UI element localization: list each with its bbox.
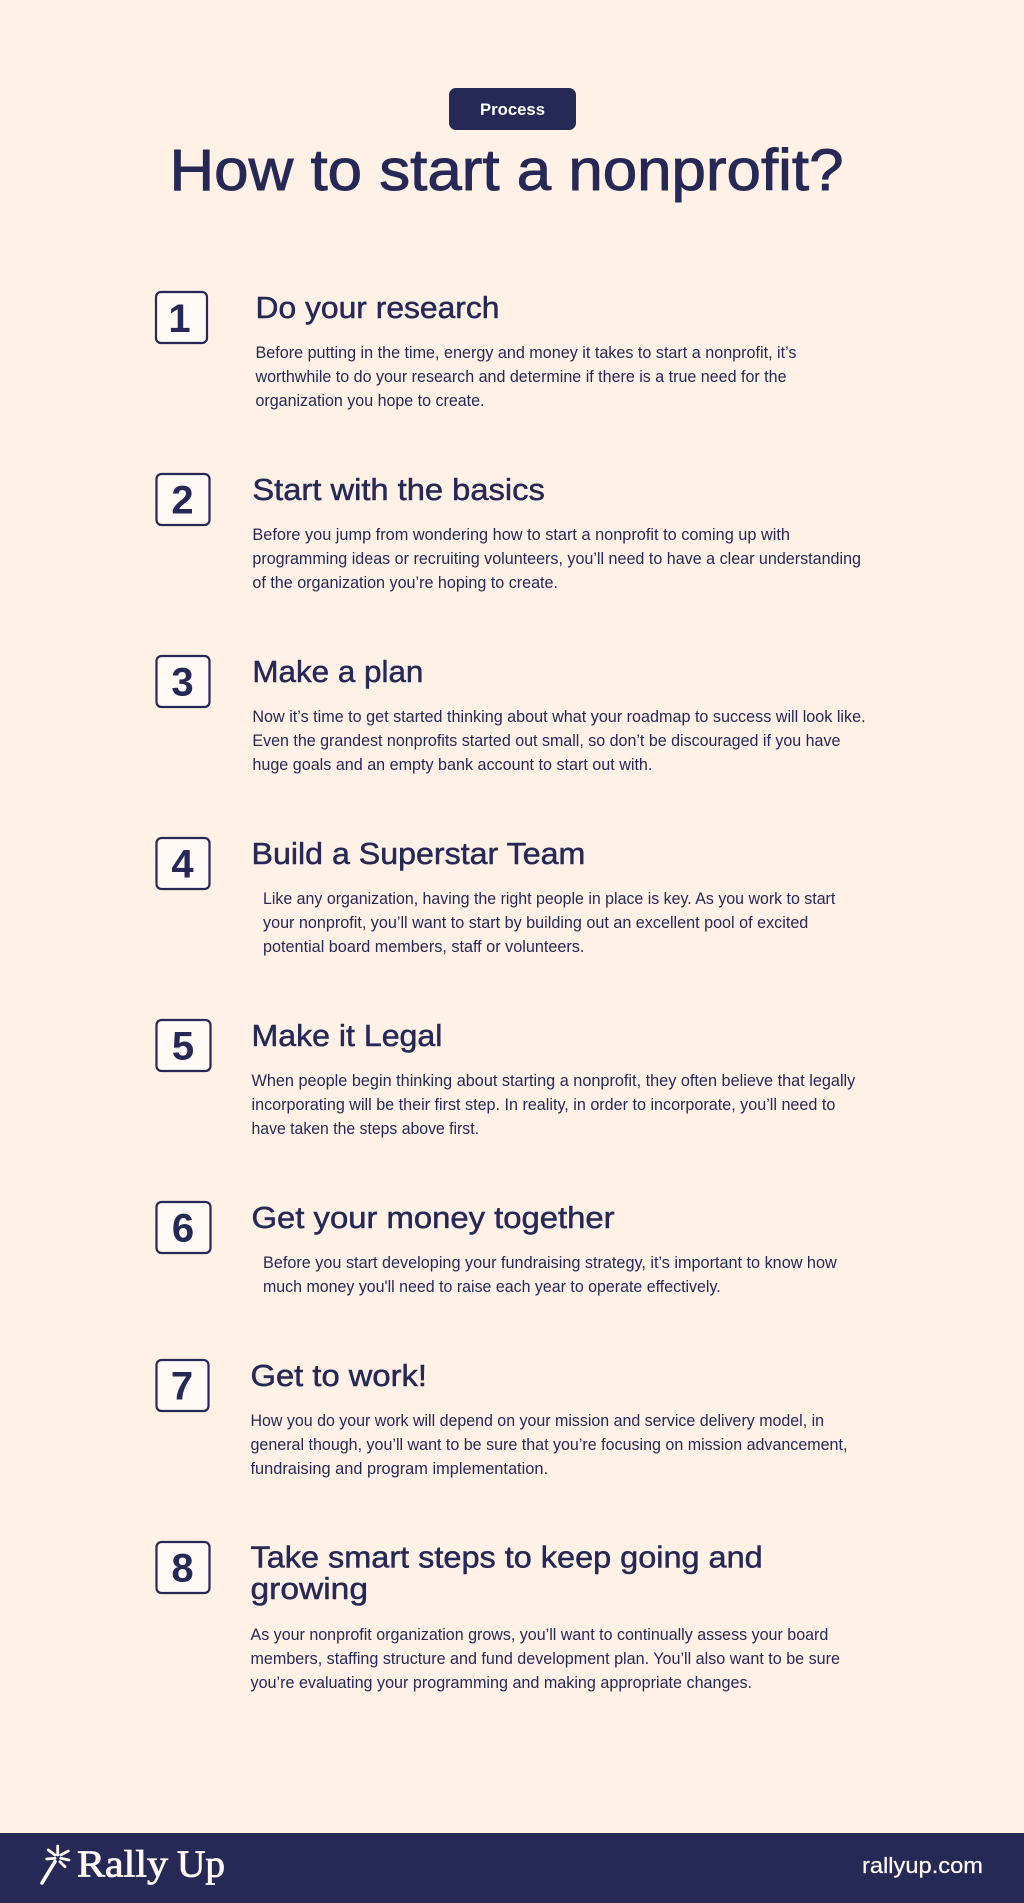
- heading: Get to work!: Get to work!: [250, 1359, 427, 1393]
- number box 2: [156, 474, 210, 525]
- body text: you’re evaluating your programming and making appropriate changes.: [250, 1674, 752, 1692]
- number box 7: 7: [171, 1364, 193, 1408]
- tag pill: Process: [449, 88, 576, 130]
- body text: huge goals and an empty bank account to start out with.: [252, 756, 652, 774]
- number box 4: [156, 838, 210, 889]
- body text: Now it’s time to get started thinking about what your roadmap to success will look like.: [252, 708, 866, 726]
- step 1: [156, 291, 796, 410]
- body text: programming ideas or recruiting volunteers, you’ll need to have a clear understanding: [252, 550, 861, 568]
- number box 8: [156, 1542, 210, 1593]
- number box 8: 8: [171, 1546, 194, 1590]
- body text: [252, 1072, 856, 1138]
- body text: [252, 526, 861, 592]
- wordmark: [77, 1844, 225, 1886]
- footer bar: [0, 1833, 1024, 1903]
- website url: rallyup.com: [862, 1853, 983, 1878]
- body text: have taken the steps above first.: [252, 1120, 479, 1138]
- heading: Take smart steps to keep going and growing: Take smart steps to keep going and: [250, 1540, 763, 1574]
- heading: Do your research: Do your research: [256, 291, 500, 325]
- heading: Make it Legal: Make it Legal: [252, 1019, 442, 1053]
- body text: Before you jump from wondering how to start a nonprofit to coming up with: [252, 526, 790, 544]
- body text: of the organization you’re hoping to create.: [252, 574, 558, 592]
- body text: general though, you’ll want to be sure that you’re focusing on mission advancement,: [250, 1436, 847, 1454]
- step 3: [156, 655, 866, 774]
- body text: As your nonprofit organization grows, you’ll want to continually assess your board: [250, 1626, 828, 1644]
- heading: Take smart steps to keep going and growing: growing: [250, 1572, 368, 1606]
- step 7: [156, 1359, 847, 1478]
- step 4: [156, 837, 836, 956]
- body text: worthwhile to do your research and determine if there is a true need for the: [255, 368, 786, 386]
- wordmark: Rally: [77, 1844, 168, 1886]
- logo: RallyUp: [42, 1844, 225, 1886]
- body text: [250, 1626, 840, 1692]
- number box 1: [156, 292, 207, 343]
- number box 4: 4: [171, 842, 194, 886]
- body text: Before you start developing your fundraising strategy, it’s important to know how: [263, 1254, 837, 1272]
- body text: organization you hope to create.: [256, 392, 484, 410]
- heading: Make a plan: Make a plan: [252, 655, 423, 689]
- tag pill: Process: Process: [480, 100, 545, 119]
- body text: [263, 890, 836, 956]
- number box 5: 5: [172, 1024, 194, 1068]
- body text: [250, 1412, 847, 1478]
- step 8: [156, 1540, 840, 1692]
- number box 6: [156, 1202, 210, 1253]
- body text: [255, 344, 796, 410]
- body text: Like any organization, having the right people in place is key. As you work to start: [263, 890, 836, 908]
- icon: sparkle wand: [42, 1846, 69, 1883]
- step 6: [156, 1201, 837, 1296]
- number box 7: [156, 1360, 208, 1411]
- number box 1: 1: [168, 297, 191, 341]
- body text: fundraising and program implementation.: [250, 1460, 548, 1478]
- heading: Build a Superstar Team: Build a Superstar Team: [252, 837, 585, 871]
- heading: Get your money together: Get your money together: [252, 1201, 615, 1235]
- heading: Take smart steps to keep going and growing: [250, 1540, 763, 1606]
- title: How to start a nonprofit?: [170, 138, 844, 203]
- number box 3: 3: [171, 660, 194, 704]
- number box 5: [156, 1020, 210, 1071]
- step 5: [156, 1019, 856, 1138]
- body text: How you do your work will depend on your mission and service delivery model, in: [250, 1412, 824, 1430]
- body text: potential board members, staff or volunteers.: [263, 938, 584, 956]
- number box 3: [156, 656, 210, 707]
- number box 6: 6: [172, 1206, 194, 1250]
- heading: Start with the basics: Start with the basics: [252, 473, 545, 507]
- number box 2: 2: [171, 478, 194, 522]
- step 2: [156, 473, 861, 592]
- body text: much money you'll need to raise each year to operate effectively.: [263, 1278, 721, 1296]
- body text: Before putting in the time, energy and money it takes to start a nonprofit, it’s: [256, 344, 796, 362]
- body text: Even the grandest nonprofits started out small, so don’t be discouraged if you have: [252, 732, 840, 750]
- body text: When people begin thinking about starting a nonprofit, they often believe that legally: [252, 1072, 856, 1090]
- body text: [263, 1254, 837, 1296]
- body text: your nonprofit, you’ll want to start by building out an excellent pool of excited: [263, 914, 808, 932]
- body text: members, staffing structure and fund development plan. You’ll also want to be sure: [250, 1650, 840, 1668]
- body text: incorporating will be their first step. In reality, in order to incorporate, you’ll need to: [252, 1096, 835, 1114]
- wordmark: Up: [177, 1844, 225, 1886]
- body text: [252, 708, 866, 774]
